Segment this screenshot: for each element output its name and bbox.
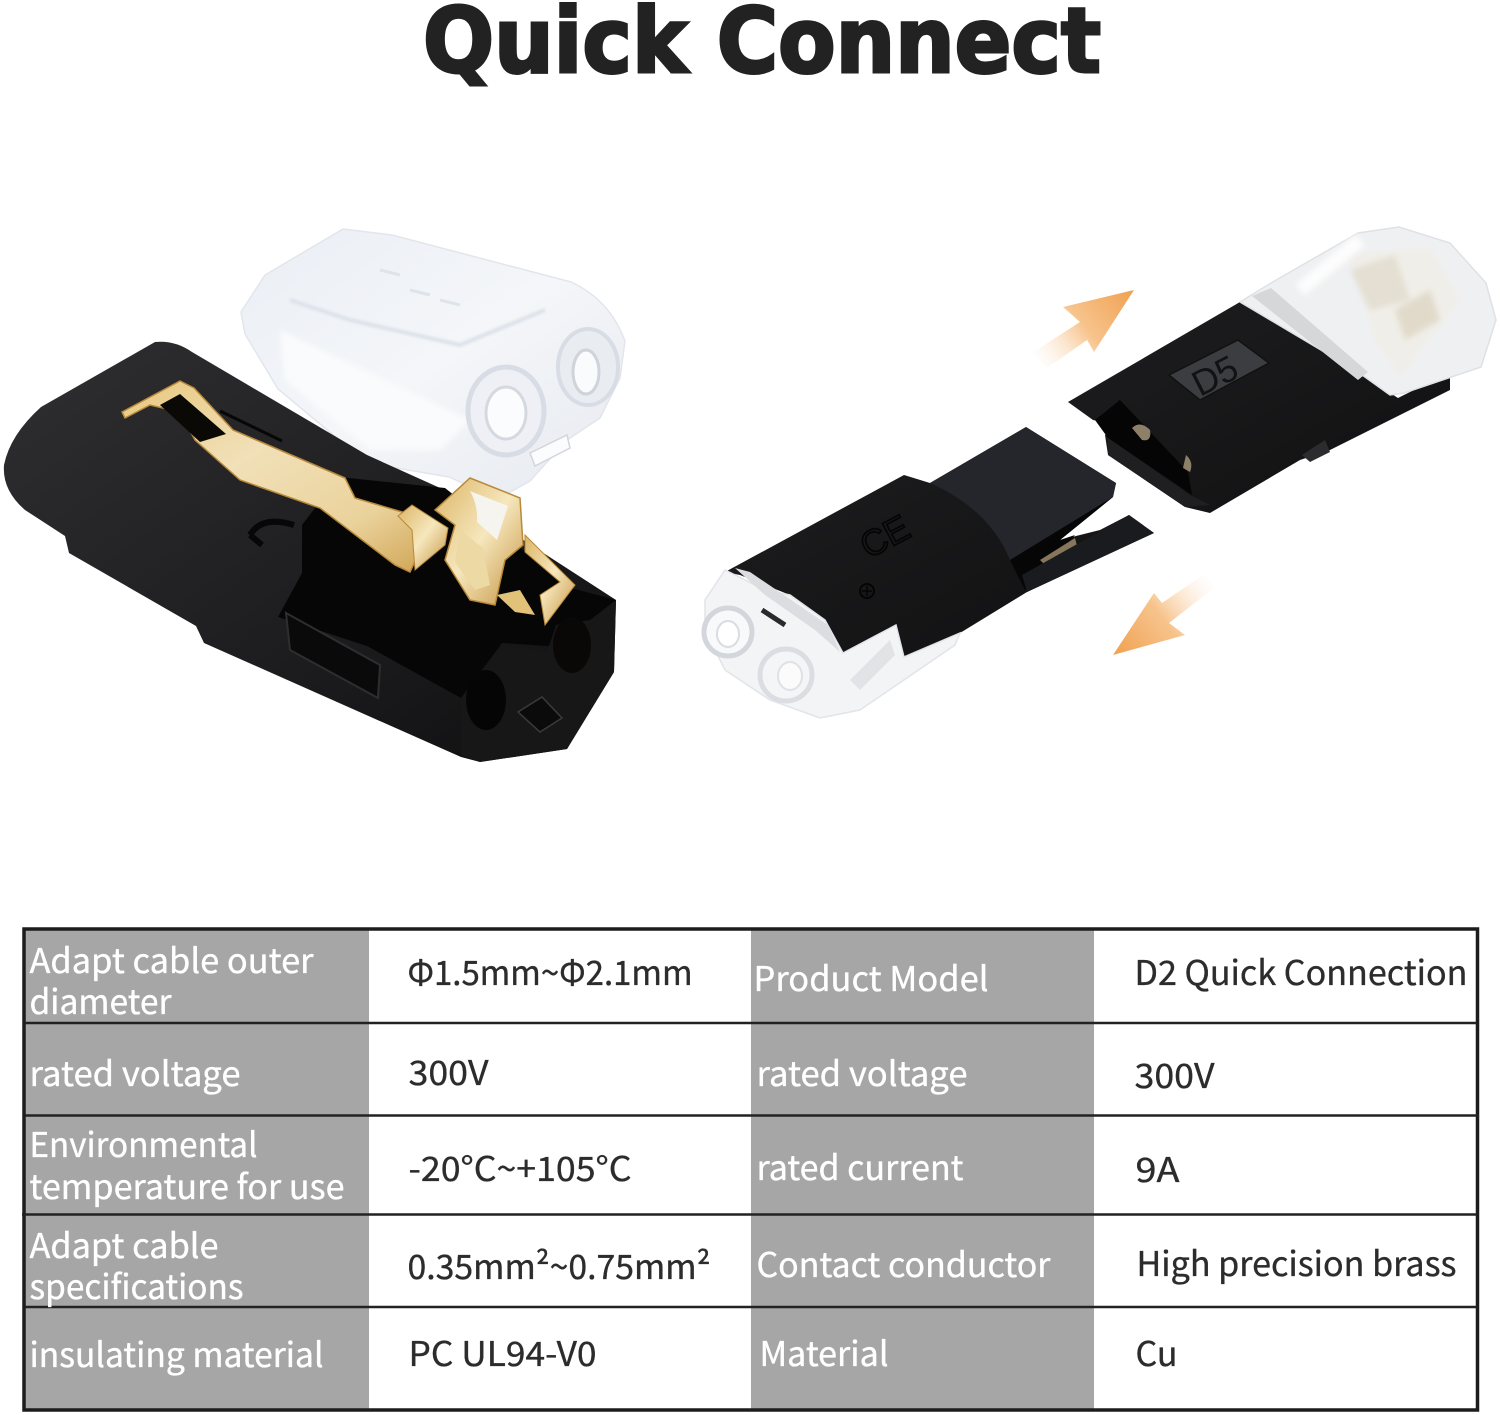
row 1: D2 Quick Connection: [1134, 946, 1468, 995]
row 5: [30, 1327, 1178, 1377]
row 4: High precision brass: [1136, 1237, 1456, 1286]
notch and slot marks: [250, 522, 294, 545]
row 5: Material: [760, 1327, 888, 1376]
row 1: [30, 934, 1468, 1024]
row 4: Contact conductor: [756, 1238, 1051, 1287]
arrow: down left: [1113, 575, 1215, 655]
row 3: 9A: [1136, 1143, 1180, 1192]
row 4: [30, 1219, 1456, 1309]
row 5: insulating material: [30, 1328, 324, 1377]
row 1: Product Model: [754, 952, 988, 1001]
housing interior: [278, 477, 616, 698]
row 3: temperature for use: [30, 1160, 344, 1209]
row 3: rated current: [756, 1141, 964, 1190]
recess slot: [286, 613, 380, 698]
row 3: [30, 1118, 1180, 1209]
row 2: 300V: [408, 1046, 489, 1095]
row 5: Cu: [1136, 1327, 1178, 1376]
clear end: [705, 570, 960, 718]
end face: [461, 600, 616, 762]
product image: upper half of connector: [1068, 227, 1496, 513]
row 2: [30, 1046, 1215, 1098]
row 5: PC UL94-V0: [408, 1327, 596, 1376]
D5 badge: [1169, 340, 1269, 404]
clear end: [1240, 227, 1496, 395]
outer frame: [24, 929, 1478, 1410]
specification table: [22, 929, 1479, 1410]
row 1: Adapt cable outer: [30, 934, 314, 983]
row 4: 0.35mm²~0.75mm²: [408, 1240, 710, 1289]
contact window: [1095, 400, 1192, 495]
row 4: Adapt cable: [30, 1219, 218, 1268]
black housing: [4, 342, 616, 762]
row 1: diameter: [30, 975, 172, 1024]
tongue: [930, 427, 1116, 560]
row 2: rated voltage: [30, 1047, 240, 1096]
product image: lower half of connector: [704, 427, 1154, 718]
slot with spring: [1010, 497, 1113, 590]
row 1: Φ1.5mm~Φ2.1mm: [408, 946, 692, 995]
ground symbol: [860, 584, 874, 598]
row 2: 300V: [1134, 1049, 1215, 1098]
grey label columns: [25, 930, 369, 1409]
brass contact: [122, 381, 575, 625]
arrow: up right: [1032, 290, 1134, 368]
product image: opened connector: [4, 229, 625, 762]
row 3: -20°C~+105°C: [408, 1142, 632, 1191]
CE mark: CE: [853, 506, 916, 566]
clear cap: [241, 229, 625, 499]
row 2: rated voltage: [756, 1047, 968, 1096]
D5 badge: D5: [1185, 347, 1245, 404]
row 3: Environmental: [30, 1118, 258, 1167]
row 4: specifications: [30, 1260, 244, 1309]
